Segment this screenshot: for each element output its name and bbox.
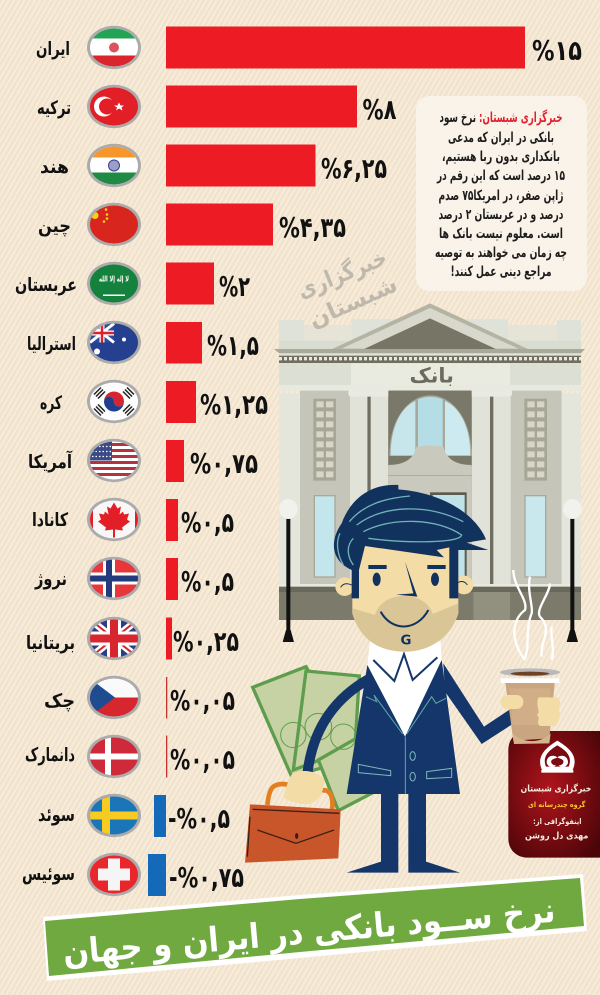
label: Britain: بریتانیا bbox=[26, 633, 75, 654]
beard bbox=[352, 596, 458, 652]
coffee cup bbox=[500, 668, 560, 744]
label: Canada: کانادا bbox=[32, 510, 68, 531]
bar: India bbox=[166, 144, 316, 186]
eyes and brows bbox=[368, 562, 446, 597]
label: Switzerland: سوئیس bbox=[22, 864, 75, 885]
value: China: %۴,۳۵ bbox=[279, 211, 346, 244]
value: Denmark: %۰,۰۵ bbox=[170, 743, 235, 776]
face bbox=[352, 545, 458, 652]
label: Arabia: عربستان bbox=[15, 275, 77, 296]
label: China: چین bbox=[38, 216, 71, 237]
ears bbox=[335, 576, 473, 596]
watermark: agency name bbox=[294, 244, 401, 334]
label: India: هند bbox=[40, 157, 69, 178]
flag: South Korea bbox=[87, 380, 141, 423]
bar: USA bbox=[166, 440, 184, 482]
flag: Saudi Arabia bbox=[87, 262, 141, 305]
bar: Czech bbox=[166, 677, 167, 718]
text panel: commentary bbox=[416, 96, 587, 291]
flag: Britain bbox=[87, 617, 141, 660]
label: Sweden: سوئد bbox=[38, 805, 75, 826]
flag: China bbox=[87, 203, 141, 246]
label: USA: آمریکا bbox=[28, 450, 73, 473]
illustration: banker with money, briefcase and coffee bbox=[245, 570, 600, 873]
value: Korea: %۱,۲۵ bbox=[200, 388, 268, 421]
author: مهدی دل روشن bbox=[525, 832, 588, 842]
credit line: اینفوگرافی از: bbox=[533, 817, 581, 826]
label: Czech: چک bbox=[44, 691, 75, 712]
logo panel bbox=[508, 731, 600, 858]
value: Sweden: -%۰,۵ bbox=[168, 802, 230, 835]
value: Czech: %۰,۰۵ bbox=[170, 684, 235, 717]
flag: USA bbox=[87, 439, 141, 482]
bar: Iran bbox=[166, 26, 525, 68]
flag: Turkey bbox=[87, 85, 141, 128]
collar bbox=[373, 654, 437, 681]
bar: Korea bbox=[166, 381, 196, 423]
bank building bbox=[274, 303, 585, 642]
flag: Norway bbox=[87, 557, 141, 600]
hair bbox=[334, 485, 488, 598]
street lamp left bbox=[279, 499, 298, 642]
sign: bank: بانک bbox=[409, 364, 454, 388]
watermark: agency name: خبرگزاری bbox=[294, 244, 391, 304]
value: Switzerland: -%۰,۷۵ bbox=[169, 861, 244, 894]
value labels bbox=[168, 34, 582, 894]
flag: Iran bbox=[87, 26, 141, 69]
value: Iran: %۱۵ bbox=[532, 34, 582, 67]
hair highlights bbox=[338, 496, 463, 565]
shirt bbox=[367, 642, 442, 738]
bar: Norway bbox=[166, 558, 178, 600]
bar: Denmark bbox=[166, 736, 167, 778]
street lamp right bbox=[563, 499, 582, 642]
label: Norway: نروژ bbox=[34, 569, 67, 590]
flag: Denmark bbox=[87, 735, 141, 778]
paragraph lines bbox=[435, 109, 567, 280]
value: Arabia: %۲ bbox=[219, 270, 250, 303]
bar: China bbox=[166, 204, 273, 246]
label: Australia: استرالیا bbox=[27, 334, 76, 355]
title banner bbox=[43, 874, 587, 981]
icon: logo arch bbox=[540, 741, 575, 773]
head bbox=[334, 485, 488, 652]
flag: Canada bbox=[87, 498, 141, 541]
country names bbox=[15, 39, 77, 885]
value: Australia: %۱,۵ bbox=[207, 329, 259, 362]
bar: Sweden bbox=[154, 795, 166, 837]
bar: Australia bbox=[166, 322, 202, 364]
steam bbox=[513, 570, 553, 660]
label: Iran: ایران bbox=[36, 39, 70, 60]
flag: Saudi Arabia: لا إله إلا الله bbox=[99, 274, 129, 284]
chin mark: G bbox=[401, 634, 411, 649]
flag: Czech bbox=[87, 676, 141, 719]
department: گروه چندرسانه ای bbox=[528, 800, 586, 809]
briefcase bbox=[245, 784, 341, 863]
watermark: agency name: شبستان bbox=[305, 272, 401, 334]
value: USA: %۰,۷۵ bbox=[190, 447, 258, 480]
value: Britain: %۰,۲۵ bbox=[173, 625, 239, 658]
jacket bbox=[347, 660, 513, 794]
value: Turkey: %۸ bbox=[362, 93, 396, 126]
smile bbox=[381, 610, 428, 626]
bar: Canada bbox=[166, 499, 178, 541]
bar: Arabia bbox=[166, 262, 214, 304]
bar: Turkey bbox=[166, 86, 357, 128]
banknotes bbox=[253, 667, 372, 811]
value: India: %۶,۲۵ bbox=[321, 152, 387, 185]
flag: Sweden bbox=[87, 794, 141, 837]
legs and shoes bbox=[347, 792, 460, 873]
flags bbox=[87, 26, 141, 896]
bar chart: interest rates bbox=[148, 26, 525, 896]
arm holding briefcase bbox=[308, 678, 370, 772]
value: Norway: %۰,۵ bbox=[181, 565, 234, 598]
bar: Britain bbox=[166, 618, 172, 660]
label: Turkey: ترکیه bbox=[37, 98, 71, 119]
title text: نرخ ســود بانکی در ایران و جهان bbox=[61, 891, 557, 973]
label: Denmark: دانمارک bbox=[25, 745, 75, 766]
right hand bbox=[501, 695, 560, 726]
flag: Switzerland bbox=[87, 853, 141, 896]
value: Canada: %۰,۵ bbox=[181, 506, 234, 539]
left hand bbox=[283, 771, 324, 804]
bar: Switzerland bbox=[148, 854, 166, 896]
label: Korea: کره bbox=[40, 393, 62, 414]
flag: Australia bbox=[87, 321, 141, 364]
flag: India bbox=[87, 144, 141, 187]
